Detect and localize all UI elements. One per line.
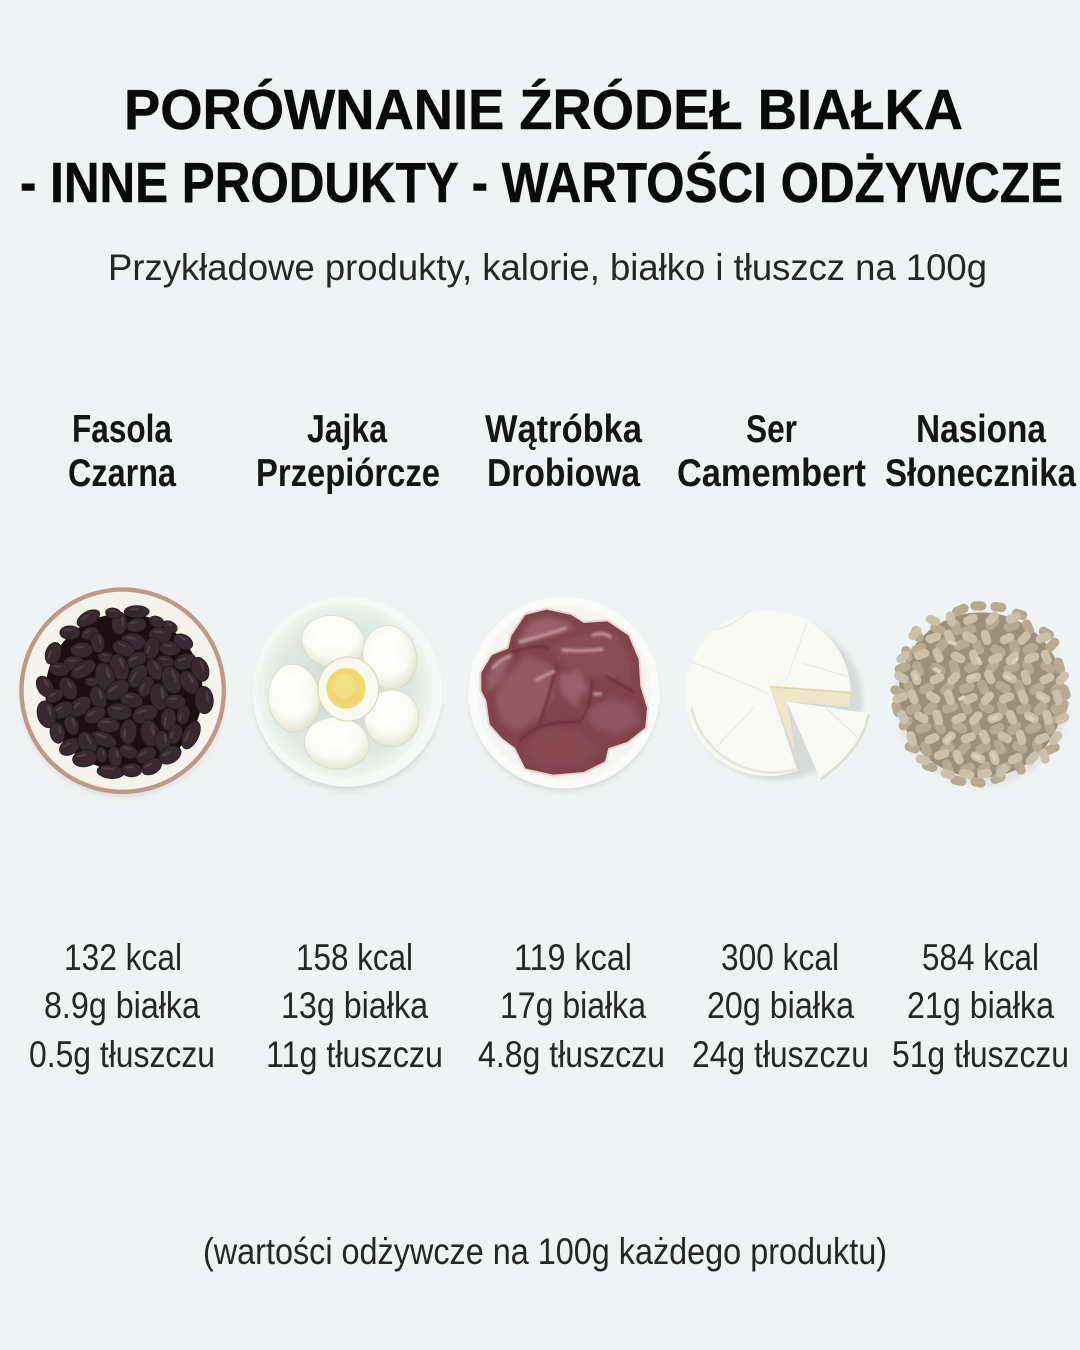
name: Ser Camembert: Ser [746,408,797,451]
name: Jajka Przepiórcze [256,408,440,495]
name: Fasola Czarna: Fasola [72,408,172,451]
values: Ser Camembert: 20g białka [707,985,854,1026]
values: Wątróbka Drobiowa: 119 kcal [514,937,632,978]
footnote: (wartości odżywcze na 100g każdego produktu) [203,1231,887,1272]
cheese wedge [787,702,870,780]
values: Jajka Przepiórcze [266,937,443,1075]
egg: lower right [364,690,419,747]
nutrition values [29,937,1069,1075]
values: Ser Camembert [692,937,869,1075]
name: Wątróbka Drobiowa [485,408,642,495]
liver creases [493,628,633,740]
egg: halved with yolk [318,657,379,721]
name: Nasiona Słonecznika: Nasiona [916,408,1046,451]
name: Wątróbka Drobiowa: Drobiowa [487,452,640,495]
title: PORÓWNANIE ŹRÓDEŁ BIAŁKA [124,78,963,142]
values: Ser Camembert: 300 kcal [721,937,839,978]
icon: bowl of black beans [19,587,226,797]
values: Fasola Czarna [29,937,215,1075]
name: Ser Camembert [677,408,866,495]
name: Jajka Przepiórcze: Przepiórcze [256,452,440,495]
values: Fasola Czarna: 8.9g białka [44,985,200,1026]
values: Wątróbka Drobiowa: 4.8g tłuszczu [478,1034,665,1075]
values: Nasiona Słonecznika [892,937,1069,1075]
icon: bowl of quail eggs [252,597,442,791]
values: Wątróbka Drobiowa [478,937,665,1075]
values: Wątróbka Drobiowa: 17g białka [500,985,646,1026]
values: Jajka Przepiórcze: 158 kcal [296,937,413,978]
egg: top [298,611,369,673]
values: Fasola Czarna: 132 kcal [64,937,182,978]
icon: camembert cheese with wedge [685,610,870,780]
name: Fasola Czarna: Czarna [68,452,176,495]
product names [68,408,1076,495]
name: Wątróbka Drobiowa: Wątróbka [485,408,642,451]
values: Jajka Przepiórcze: 13g białka [281,985,428,1026]
name: Nasiona Słonecznika [885,408,1076,495]
icon: pile of sunflower seeds [895,606,1068,786]
title [20,78,1063,215]
name: Fasola Czarna [68,408,176,495]
egg: left [265,662,323,734]
name: Jajka Przepiórcze: Jajka [307,408,387,451]
egg: right [356,620,424,695]
egg: bottom [302,715,371,772]
liver lobes [487,617,640,767]
values: Nasiona Słonecznika: 584 kcal [922,937,1039,978]
subtitle: Przykładowe produkty, kalorie, białko i tłuszcz na 100g [108,247,987,288]
values: Fasola Czarna: 0.5g tłuszczu [29,1034,215,1075]
values: Nasiona Słonecznika: 21g białka [907,985,1054,1026]
values: Ser Camembert: 24g tłuszczu [692,1034,869,1075]
cheese wheel [685,611,851,776]
icon: plate of chicken liver [468,597,660,791]
name: Ser Camembert: Camembert [677,452,866,495]
cut face [770,687,851,770]
values: Jajka Przepiórcze: 11g tłuszczu [266,1034,443,1075]
